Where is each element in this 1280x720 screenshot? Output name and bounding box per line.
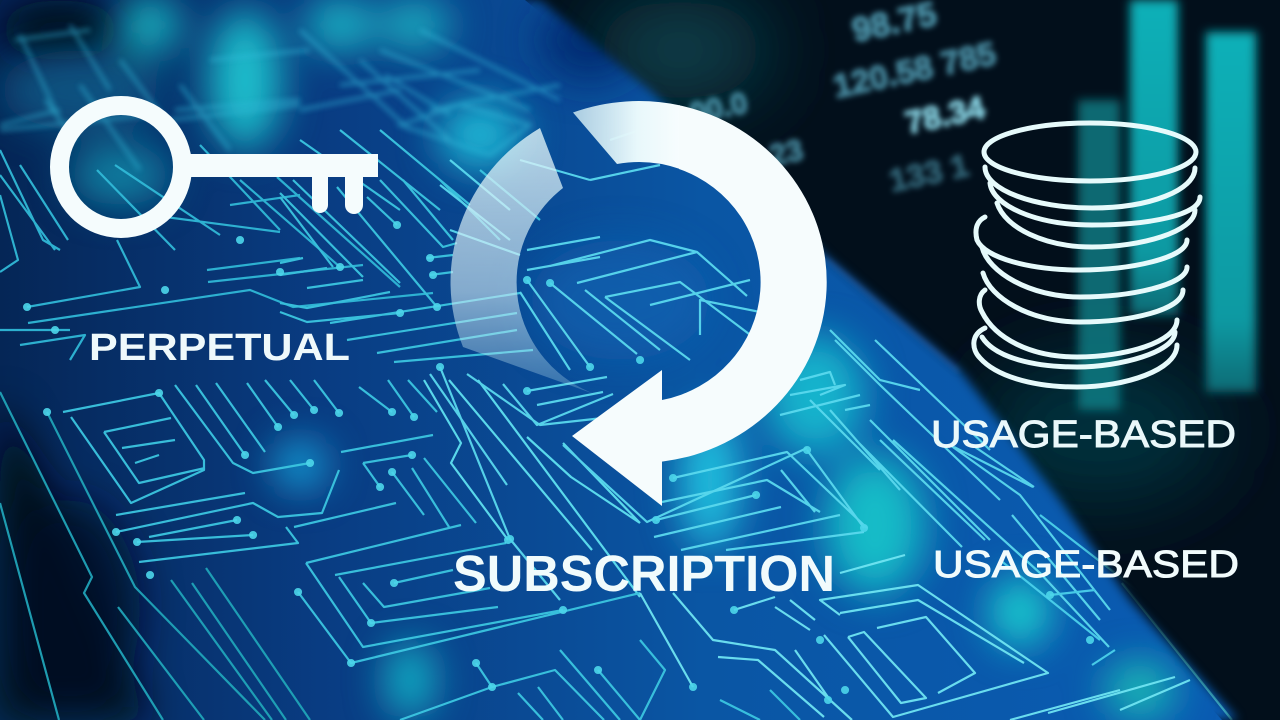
- trace pads: [27, 225, 1090, 700]
- blurred figures: 23: [767, 134, 806, 173]
- distant blurred traces: [0, 25, 560, 170]
- label: usage-based: USAGE-BASED: [931, 414, 1236, 456]
- blurred figures: 78.34: [902, 89, 988, 141]
- icon: coin stack (usage-based): [974, 123, 1200, 387]
- label: perpetual: PERPETUAL: [89, 327, 350, 369]
- label: subscription: SUBSCRIPTION: [453, 545, 835, 602]
- centre traces: [430, 110, 807, 600]
- icon: subscription cycle arrow: [451, 101, 827, 506]
- blurred figures: [687, 0, 999, 199]
- blurred figures: 133 1: [886, 147, 972, 199]
- chart bars: [1078, 0, 1256, 410]
- fading start of ring: [573, 101, 680, 169]
- label: usage-based repeated: USAGE-BASED: [933, 544, 1239, 586]
- left upper traces: [0, 145, 433, 360]
- blurred figures: 00.0: [687, 86, 751, 131]
- faded ring segment: [451, 128, 597, 395]
- blurred figures: 120.58 785: [830, 34, 999, 105]
- icon: key (perpetual): [60, 106, 378, 228]
- dark vignettes: [0, 0, 640, 720]
- board edge highlight: [827, 257, 960, 370]
- solid ring and arrowhead: [572, 105, 827, 506]
